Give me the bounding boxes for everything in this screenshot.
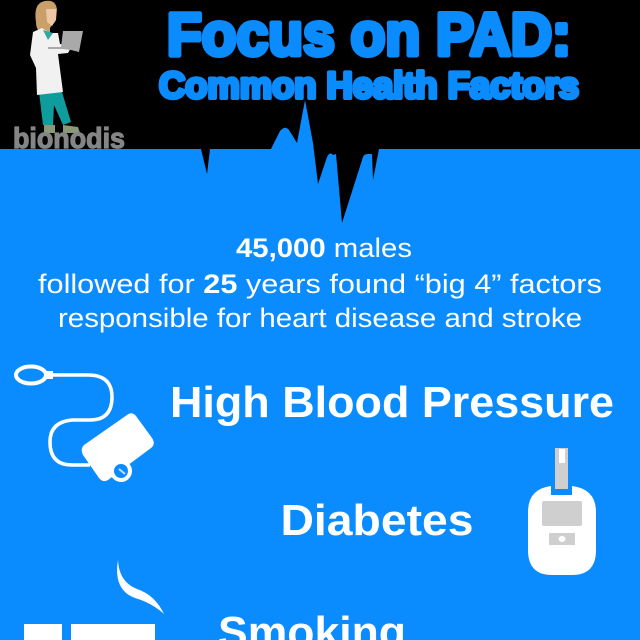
scrubs collar [43, 30, 53, 40]
subtitle: Common Health Factors [159, 65, 579, 106]
filter [24, 624, 62, 640]
line 2: followed for 25 years found “big 4” factors [38, 269, 602, 299]
gauge [112, 462, 130, 480]
doctor illustration [30, 1, 83, 133]
icon: cigarette with smoke [24, 560, 164, 640]
hair [35, 1, 57, 33]
icon: blood pressure cuff [16, 366, 154, 481]
heading: high blood pressure: High Blood Pressure [170, 378, 614, 427]
button dot [558, 536, 566, 542]
lab coat [30, 28, 72, 95]
screen [542, 501, 582, 526]
laptop [48, 31, 83, 52]
line 3: responsible for heart disease and stroke [58, 303, 582, 333]
meter body [528, 486, 596, 575]
logo wordmark: bionodis [13, 123, 125, 155]
cigarette body [71, 624, 155, 640]
bulb [16, 366, 46, 384]
tube [50, 375, 112, 465]
valve [44, 371, 53, 379]
shoes [44, 125, 80, 133]
strip tip [559, 449, 565, 463]
needle [119, 469, 125, 474]
button [549, 533, 575, 545]
heading: diabetes: Diabetes [280, 496, 474, 545]
icon: glucose meter [528, 448, 596, 575]
cuff [82, 413, 154, 481]
face [46, 9, 56, 26]
title: Focus on PAD: [167, 1, 571, 68]
line 1: 45,000 males [236, 233, 412, 263]
smoke [117, 560, 164, 614]
intro text [38, 233, 602, 333]
test strip [555, 448, 568, 489]
trousers [39, 92, 71, 125]
